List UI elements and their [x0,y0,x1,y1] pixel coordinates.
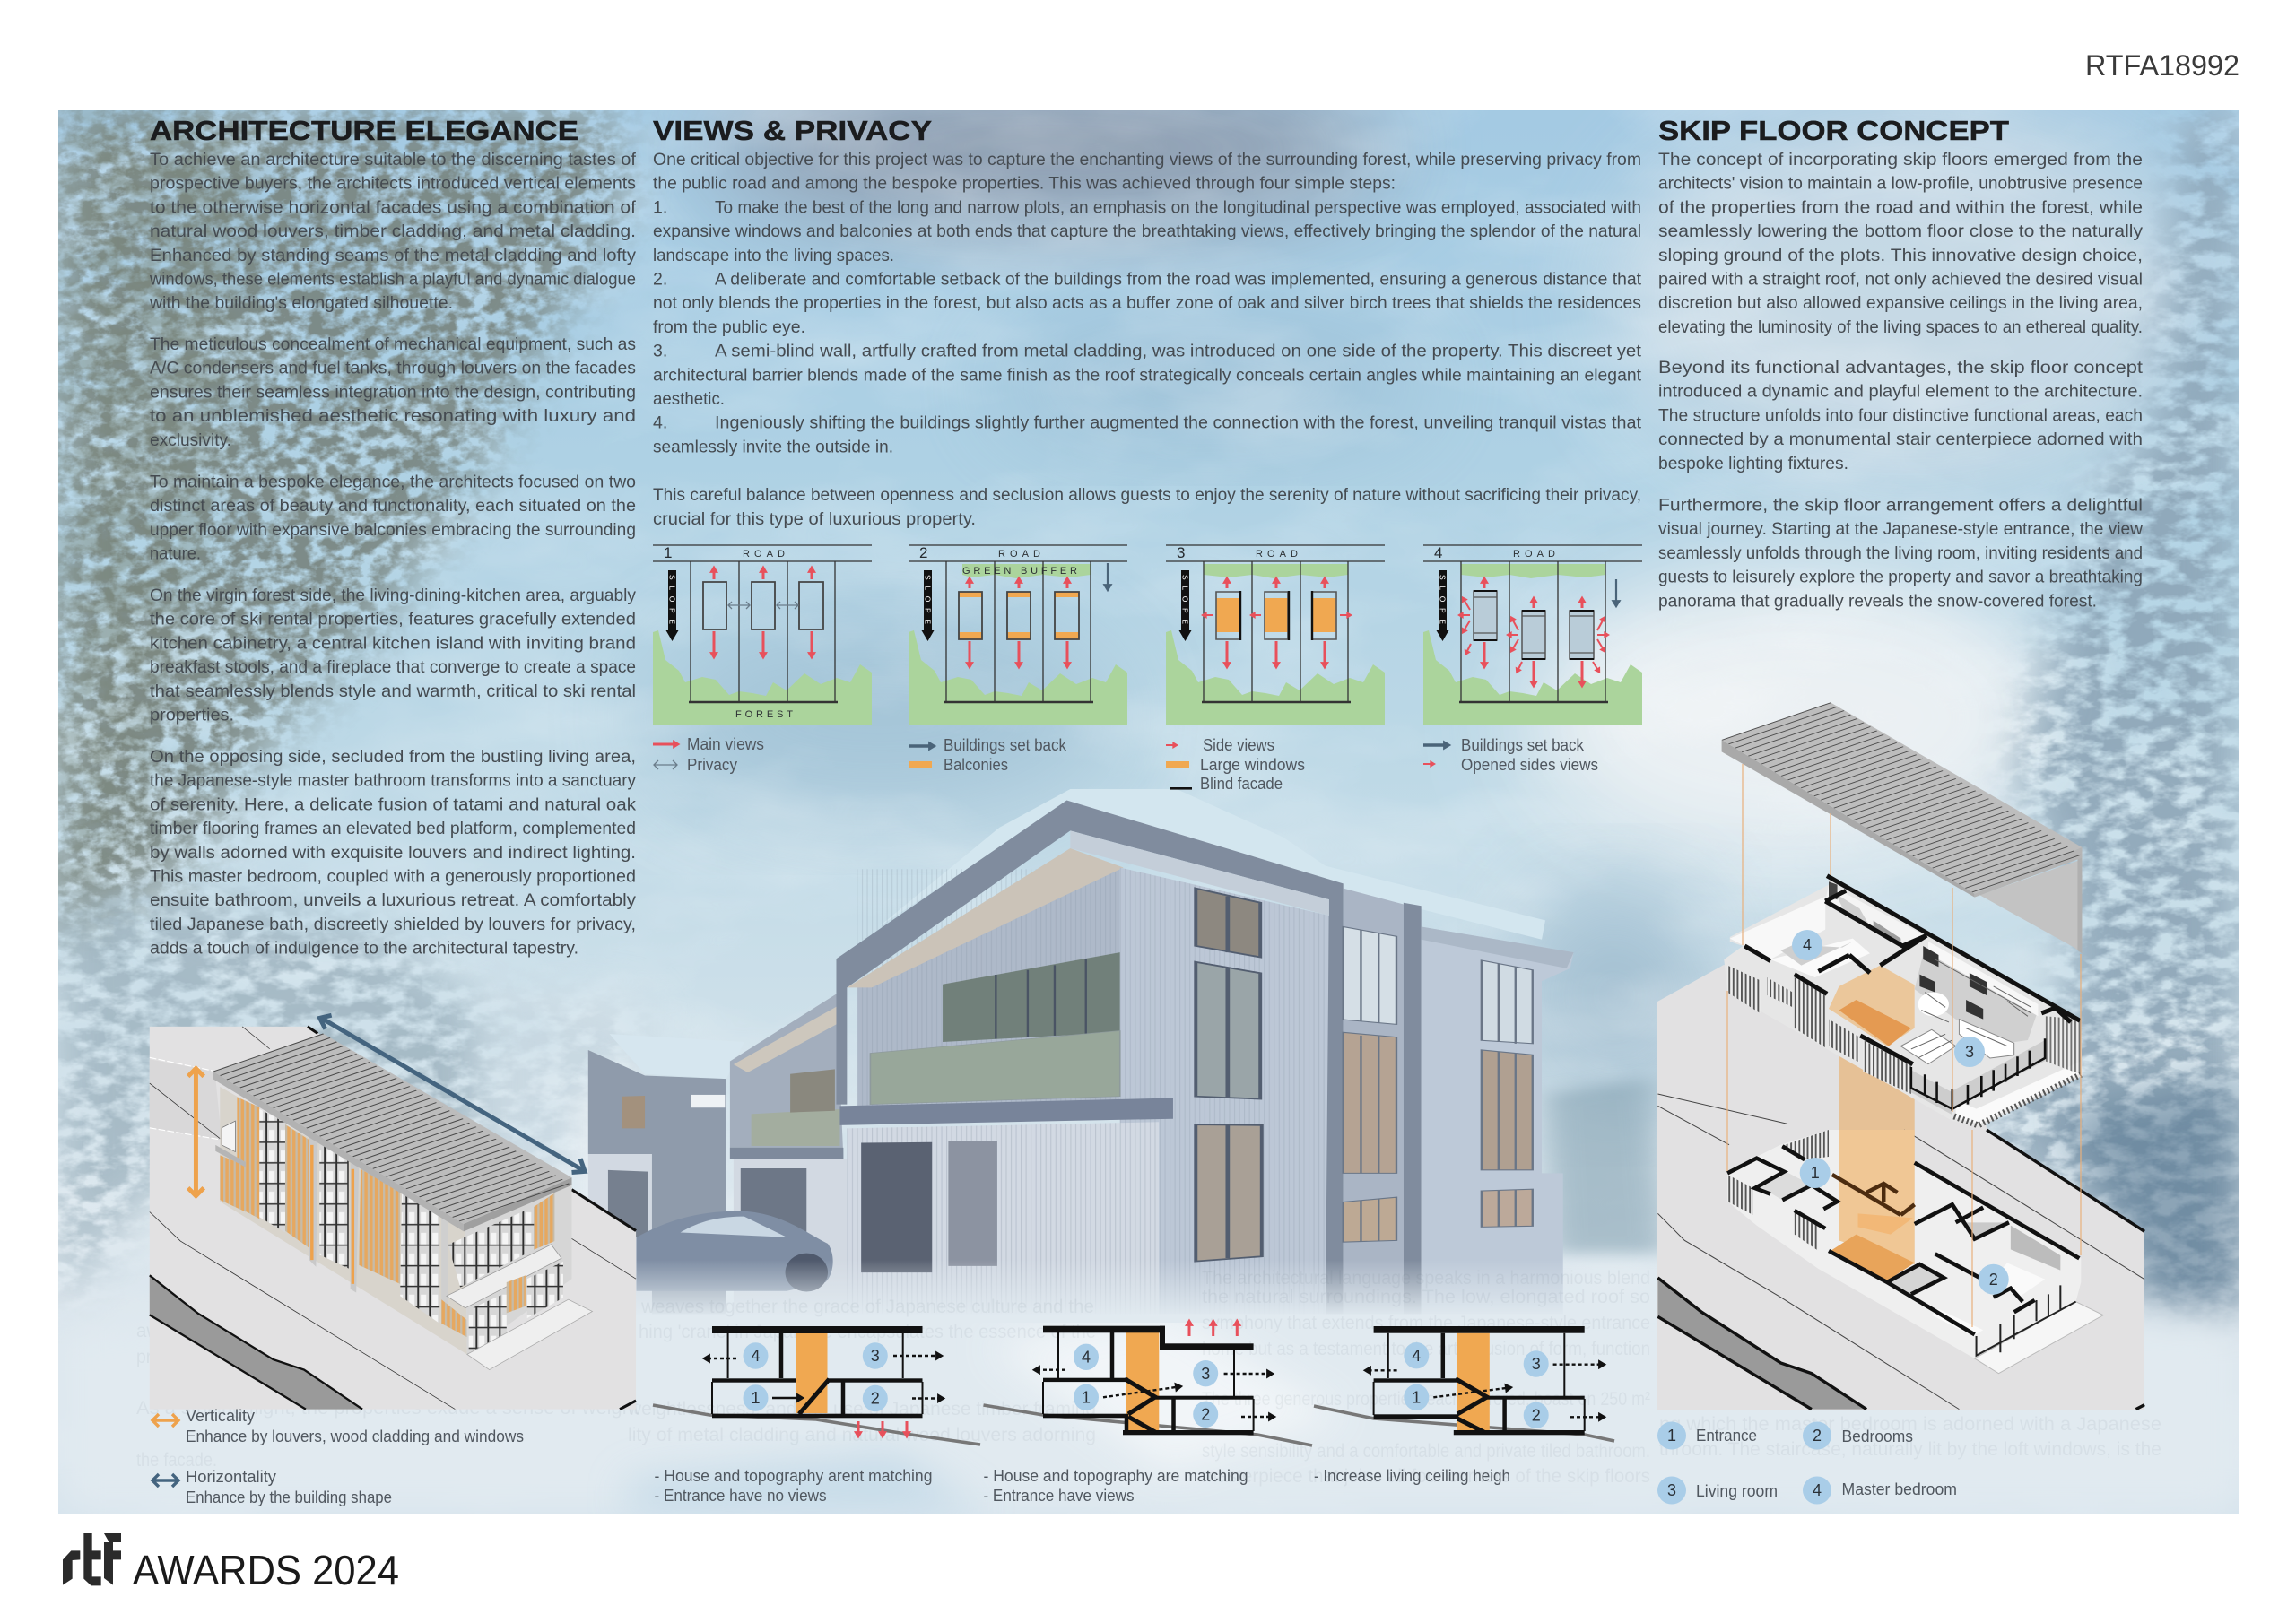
text block: architecture elegance: natural wood louvers, timber cladding, and metal cladding. [150,221,636,241]
text block: architecture elegance: On the opposing side, secluded from the bustling living area, [150,747,636,767]
legend: room key: Bedrooms [1842,1427,1913,1445]
main wall [1120,867,1329,1314]
awards logo: AWARDS 2024 [133,1547,399,1593]
text block: skip floor concept: panorama that gradually reveals the snow-covered forest. [1658,591,2097,611]
text block: skip floor concept: seamlessly lowering the bottom floor close to the naturally [1658,221,2143,241]
text block: architecture elegance: kitchen cabinetry, a central kitchen island with inviting brand [150,633,636,653]
section 2 note: - Entrance have views [983,1486,1134,1505]
diagram 1: main views and privacy: ROAD [743,549,785,560]
section 3: increased living ceiling height [1314,1326,1614,1441]
section 3: increased living ceiling height: 4 [1412,1347,1421,1365]
faint background copy: ng which the master bedroom is adorned with a Japanese [1659,1414,2161,1435]
text block: architecture elegance: ensuite bathroom, unveils a luxurious retreat. A comfortably [150,890,636,910]
text block: views and privacy: seamlessly invite the outside in. [653,437,893,456]
room number markers on axonometric: 4 [1803,936,1812,954]
section 2 note: - House and topography are matching [983,1466,1248,1485]
snow on roof [879,789,1545,940]
text block: views and privacy: not only blends the properties in the forest, but also acts as a buffer zone of oak and silver birch trees that shields the residences [653,293,1641,313]
faint background copy: the facade. [136,1450,217,1471]
legend: room key: 3 [1667,1481,1676,1499]
text block: skip floor concept: seamlessly unfolds through the living room, inviting residents and [1658,543,2143,563]
text block: architecture elegance: tiled Japanese bath, discreetly shielded by louvers for privacy, [150,915,636,934]
diagram 2: set back and balconies: ROAD [998,549,1040,560]
car [637,1211,833,1291]
legend: verticality and horizontality: Enhance by louvers, wood cladding and windows [186,1427,524,1445]
stair void band between floors [1839,1049,1915,1264]
section 1 note: - House and topography arent matching [655,1466,933,1485]
text block: architecture elegance: to the otherwise horizontal facades using a combination of [150,197,637,217]
text block: skip floor concept: paired with a straight roof, not only achieved the desired visual [1658,269,2143,289]
text block: skip floor concept: discretion but also allowed expansive ceilings in the living area, [1658,293,2143,313]
legend: verticality and horizontality: Horizontality [186,1467,277,1486]
text block: architecture elegance: of serenity. Here, a delicate fusion of tatami and natural oak [150,794,636,814]
text block: views and privacy: A semi-blind wall, artfully crafted from metal cladding, was introduced on one side of the property. This discreet yet [715,342,1642,361]
text block: architecture elegance: On the virgin forest side, the living-dining-kitchen area, arguably [150,586,636,605]
diagram 3 legend [1166,735,1305,793]
faint background copy: home but as a testament to the artful fusion of form, function [1202,1339,1650,1359]
exploded axonometric: roof [1722,702,2082,953]
text block: architecture elegance: by walls adorned with exquisite louvers and indirect lighting. [150,843,636,863]
section 1: house not matching topography: 1 [751,1389,761,1407]
text block: architecture elegance: properties. [150,705,234,725]
exploded axonometric: upper floor [1724,876,2082,1127]
heading: skip floor concept: SKIP FLOOR CONCEPT [1658,115,2009,146]
section 1 note [655,1466,933,1505]
right tree [1973,110,2239,1318]
text block: views and privacy: This careful balance between openness and seclusion allows guests to enjoy the serenity of nature without sacrificing their privacy, [653,485,1641,505]
legend: room key: 2 [1813,1427,1822,1445]
wall windows [1196,889,1260,957]
text block: skip floor concept: Beyond its functional advantages, the skip floor concept [1658,358,2144,378]
text block: architecture elegance: to an unblemished aesthetic resonating with luxury and [150,406,636,426]
text block: skip floor concept: bespoke lighting fixtures. [1658,454,1848,473]
faint background copy: symphony that extends from the Japanese-style entrance [1202,1313,1650,1333]
text block: architecture elegance [149,150,637,959]
faint background copy: As a striking flight, the properties exude a sense of weight [136,1398,639,1419]
section 3: increased living ceiling height: 1 [1412,1388,1421,1406]
faint background copy: the natural surroundings. The low, elongated roof so [1202,1287,1650,1307]
diagram 4 legend: Opened sides views [1461,755,1598,774]
section 1: house not matching topography: 3 [871,1347,880,1365]
faint background copy: The architectural language speaks in a harmonious blend [1202,1268,1650,1289]
text block: skip floor concept: connected by a monumental stair centerpiece adorned with [1658,430,2143,449]
diagram 4: opened side views: ROAD [1513,549,1555,560]
text block: architecture elegance: prospective buyers, the architects introduced vertical elements [150,174,636,194]
faint background copy [136,1268,2161,1487]
axonometric view of house with vertical and horizontal arrows [150,1015,636,1410]
text block: views and privacy [653,150,1642,529]
second house [730,994,843,1159]
windows with balcony [943,952,1120,1042]
faint background copy: awe-in [136,1321,190,1341]
awards logo [63,1533,399,1593]
heading: architecture elegance: ARCHITECTURE ELEGANCE [150,115,578,146]
faint background copy: weaves together the grace of Japanese culture and the [640,1297,1094,1317]
text block: architecture elegance: upper floor with expansive balconies embracing the surrounding [150,520,636,540]
text block: views and privacy: 4. [653,413,667,433]
text block: views and privacy: architectural barrier blends made of the same finish as the roof strategically conceals certain angles while maintaining an elegant [653,365,1642,385]
legend: room key: Entrance [1696,1426,1757,1445]
text block: architecture elegance: breakfast stools, and a fireplace that converge to create a space [150,657,636,677]
diagram 4: opened side views: SLOPE [1439,575,1448,624]
soffit [847,848,1124,987]
diagram 4: opened side views [1423,544,1642,725]
text block: views and privacy: Ingeniously shifting the buildings slightly further augmented the connection with the forest, unveiling tranquil vistas that [715,413,1642,433]
right side bush [1545,1077,1665,1254]
heading: views and privacy: VIEWS & PRIVACY [653,115,932,146]
text block: architecture elegance: distinct areas of beauty and functionality, each situated on the [150,496,636,516]
faint background copy: throom. The staircase, naturally lit by the loft windows, is the [1659,1439,2161,1460]
faint background copy: hing 'crane' in Japanese encapsulates the essence of the [639,1322,1096,1342]
arrow: horizontality [320,1015,585,1173]
text block: skip floor concept [1658,150,2144,611]
legend: verticality and horizontality: Enhance by the building shape [186,1488,392,1506]
text block: views and privacy: 2. [653,269,667,289]
text block: architecture elegance: ensures their seamless integration into the design, contributing [150,382,636,402]
diagram 3: side views and blind facade [1166,544,1385,725]
text block: views and privacy: crucial for this type of luxurious property. [653,509,976,529]
text block: architecture elegance: Enhanced by standing seams of the metal cladding and lofty [150,246,636,265]
text block: views and privacy: One critical objective for this project was to capture the enchanting views of the surrounding forest, while preserving privacy from [653,150,1641,169]
diagram 2 legend: Buildings set back [944,735,1067,754]
diagram 2 legend [909,735,1067,774]
text block: views and privacy: 1. [653,197,667,217]
column [1404,903,1422,1314]
faint background copy: weightlessness, and the use of Japanese timber framing [627,1399,1096,1419]
text block: architecture elegance: with the building's elongated silhouette. [149,293,453,313]
text block: skip floor concept: visual journey. Starting at the Japanese-style entrance, the view [1658,519,2144,539]
reference code: RTFA18992 [2085,49,2239,82]
text block: architecture elegance: To maintain a bespoke elegance, the architects focused on two [150,472,636,491]
text block: architecture elegance: adds a touch of indulgence to the architectural tapestry. [150,939,578,959]
diagram 3: side views and blind facade: SLOPE [1180,575,1189,624]
text block: skip floor concept: Furthermore, the skip floor arrangement offers a delightful [1658,495,2143,515]
text block: architecture elegance: To achieve an architecture suitable to the discerning tastes of [150,150,637,169]
legend: room key: Living room [1696,1481,1778,1500]
diagram 4 legend [1423,735,1598,774]
legend: room key: Master bedroom [1842,1480,1957,1498]
section 3: increased living ceiling height: 2 [1532,1406,1541,1424]
section 2: house matching topography: 4 [1082,1349,1091,1367]
diagram 3: side views and blind facade: 3 [1177,544,1185,561]
text block: architecture elegance: This master bedroom, coupled with a generously proportioned [150,866,636,886]
text block: skip floor concept: elevating the luminosity of the living spaces to an ethereal quality. [1658,317,2143,337]
section 2: house matching topography [983,1325,1312,1445]
legend: room key [1657,1422,1957,1505]
diagram 4: opened side views: 4 [1434,544,1442,561]
text block: architecture elegance: the core of ski rental properties, features gracefully extended [150,610,636,629]
text block: architecture elegance: exclusivity. [150,430,231,450]
section 3: increased living ceiling height: 3 [1532,1355,1541,1373]
text block: views and privacy: 3. [653,342,667,361]
diagram 1: main views and privacy: 1 [664,544,672,561]
diagram 4 legend: Buildings set back [1461,735,1585,754]
recessed centre [1344,889,1404,1314]
explosion guide lines [1727,764,2081,1327]
text block: views and privacy: the public road and among the bespoke properties. This was achieved through four simple steps: [653,174,1396,194]
faint background copy: The three generous properties, each mirrored, boast on 250 m² [1202,1389,1650,1410]
left snowy trees [58,897,484,1309]
section 2: house matching topography: 2 [1201,1406,1210,1424]
diagram 1 legend: Main views [687,734,764,753]
legend: verticality and horizontality [152,1406,524,1506]
section 1: house not matching topography: 2 [871,1390,880,1408]
text block: views and privacy: expansive windows and balconies at both ends that capture the breathtaking views, effectively bringing the splendor of the natural [653,221,1641,241]
room number markers on axonometric: 1 [1811,1164,1820,1182]
text block: skip floor concept: guests to leisurely explore the property and savor a breathtaking [1658,568,2143,587]
right wing [1422,927,1574,1314]
faint background copy: style sensibility and a comfortable and private tiled bathroom. [1202,1441,1650,1462]
text block: architecture elegance: that seamlessly blends style and warmth, critical to ski rental [150,681,636,701]
diagram 3 legend: Side views [1203,735,1274,754]
legend: verticality and horizontality: Verticality [186,1406,256,1425]
text block: skip floor concept: introduced a dynamic and playful element to the architecture. [1658,382,2143,402]
section 2: house matching topography: 1 [1082,1388,1091,1406]
text block: skip floor concept: The concept of incorporating skip floors emerged from the [1658,150,2143,169]
text block: views and privacy: To make the best of the long and narrow plots, an emphasis on the longitudinal perspective was employed, associated with [715,197,1641,217]
main left face [857,869,1120,1109]
text block: architecture elegance: the Japanese-style master bathroom transforms into a sanctuary [150,771,636,791]
text block: views and privacy: aesthetic. [653,389,725,409]
text block: views and privacy: A deliberate and comfortable setback of the buildings from the road was implemented, ensuring a generous distance that [715,269,1642,289]
right face [465,1179,572,1354]
left pine branches [58,110,619,933]
faint background copy: masterpiece that joins all four corners of the skip floors [1202,1466,1650,1487]
legend: room key: 1 [1667,1427,1676,1445]
room number markers on axonometric: 3 [1965,1043,1974,1061]
text block: architecture elegance: windows, these elements establish a playful and dynamic dialogue [149,269,636,289]
snow fade at house base [574,1260,1659,1323]
third house [610,1035,639,1051]
text block: architecture elegance: A/C condensers and fuel tanks, through louvers on the facades [150,359,636,378]
legend: room key: 4 [1813,1481,1822,1499]
diagram 1: main views and privacy: SLOPE [667,575,676,624]
diagram 3 legend: Large windows [1200,755,1305,774]
snow ground [58,1291,2239,1514]
roof [213,1072,464,1231]
text block: views and privacy: landscape into the living spaces. [653,246,894,265]
section 1 note: - Entrance have no views [655,1486,827,1505]
room number markers on axonometric [1792,930,2009,1295]
text block: architecture elegance: timber flooring frames an elevated bed platform, complemented [150,819,636,838]
arrow: verticality [188,1069,204,1196]
section 2: house matching topography: 3 [1201,1365,1210,1383]
text block: architecture elegance: nature. [150,544,201,564]
room number markers on axonometric: 2 [1989,1271,1998,1289]
section 1: house not matching topography: 4 [751,1347,761,1365]
section 3 note: - Increase living ceiling heigh [1314,1466,1510,1485]
site plate under exploded axonometric [1657,965,2144,1410]
diagram 3: side views and blind facade: ROAD [1256,549,1298,560]
diagram 1 legend: Privacy [687,755,738,774]
text block: skip floor concept: architects' vision to maintain a low-profile, unobtrusive presence [1658,174,2143,194]
section 2 note [983,1466,1248,1505]
diagram 2: set back and balconies [909,544,1127,725]
diagram 3 legend: Blind facade [1200,774,1283,793]
roof frame [836,800,1344,1314]
exploded axonometric: lower floor [1657,1094,2144,1410]
diagram 2: set back and balconies: GREEN BUFFER [962,566,1077,577]
text block: views and privacy: from the public eye. [653,317,805,337]
garage level [847,1122,1159,1314]
diagram 1 legend [653,734,764,774]
faded house render [574,789,1665,1314]
text block: skip floor concept: The structure unfolds into four distinctive functional areas, each [1658,405,2143,425]
diagram 2 legend: Balconies [944,755,1008,774]
diagram 2: set back and balconies: 2 [919,544,927,561]
facade walls [220,1087,467,1354]
text block: skip floor concept: of the properties from the road and within the forest, while [1658,197,2143,217]
diagram 1: main views and privacy [653,544,872,725]
diagram 2: set back and balconies: SLOPE [924,575,933,624]
section 1: house not matching topography [653,1326,980,1445]
text block: skip floor concept: sloping ground of the plots. This innovative design choice, [1658,246,2143,265]
balcony [222,1121,235,1152]
faint background copy: project. be [136,1347,217,1367]
diagram 1: main views and privacy: FOREST [735,709,793,720]
text block: architecture elegance: The meticulous concealment of mechanical equipment, such as [150,334,636,354]
faint background copy: lity of metal cladding and natural wood louvers adorning [628,1425,1096,1445]
